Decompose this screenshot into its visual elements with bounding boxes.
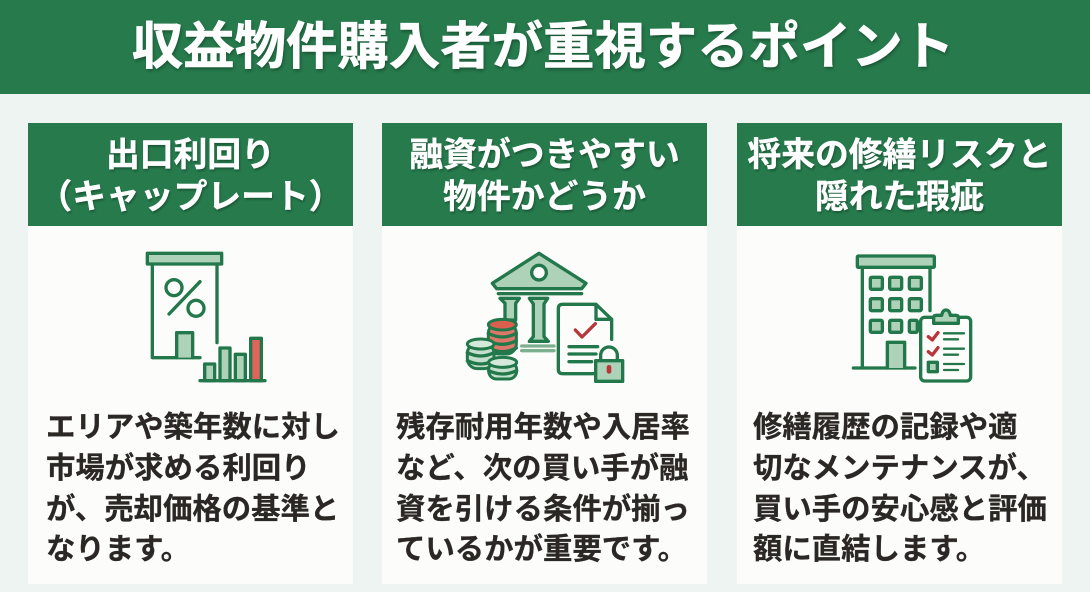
body text: 切なメンテナンスが、 xyxy=(753,452,1046,485)
icon: bank, coins, document and lock xyxy=(466,252,624,383)
body text: ているかが重要です。 xyxy=(396,533,687,566)
header band xyxy=(0,0,1090,94)
body text xyxy=(753,411,1047,566)
body text: 額に直結します。 xyxy=(753,533,985,566)
heading: exit cap rate: （キャップレート） xyxy=(38,178,343,216)
panel: repair risk xyxy=(737,123,1062,584)
panel: financing xyxy=(382,123,707,584)
panel: exit cap rate xyxy=(28,123,353,584)
heading: repair risk: 隠れた瑕疵 xyxy=(815,178,984,216)
heading: financing: 物件かどうか xyxy=(443,178,646,216)
body text: 資を引ける条件が揃っ xyxy=(396,493,690,526)
body text xyxy=(396,411,690,566)
heading: exit cap rate: 出口利回り xyxy=(106,136,275,174)
icon: building and checklist xyxy=(852,254,972,383)
heading: exit cap rate xyxy=(28,123,353,226)
body text xyxy=(46,411,340,566)
body text: 市場が求める利回り xyxy=(46,452,311,485)
body text: 残存耐用年数や入居率 xyxy=(396,411,690,444)
body text: が、売却価格の基準と xyxy=(46,493,339,526)
body text: エリアや築年数に対し xyxy=(46,411,340,444)
title: 収益物件購入者が重視するポイント xyxy=(132,17,954,75)
heading: financing: 融資がつきやすい xyxy=(409,136,680,174)
heading: repair risk: 将来の修繕リスクと xyxy=(747,136,1052,174)
body text: なります。 xyxy=(46,533,190,566)
icon: building with percent and bar chart xyxy=(146,252,267,382)
heading: repair risk xyxy=(737,123,1062,226)
body text: 修繕履歴の記録や適 xyxy=(753,411,1018,444)
body text: など、次の買い手が融 xyxy=(396,452,688,485)
heading: financing xyxy=(382,123,707,226)
body text: 買い手の安心感と評価 xyxy=(753,493,1047,526)
